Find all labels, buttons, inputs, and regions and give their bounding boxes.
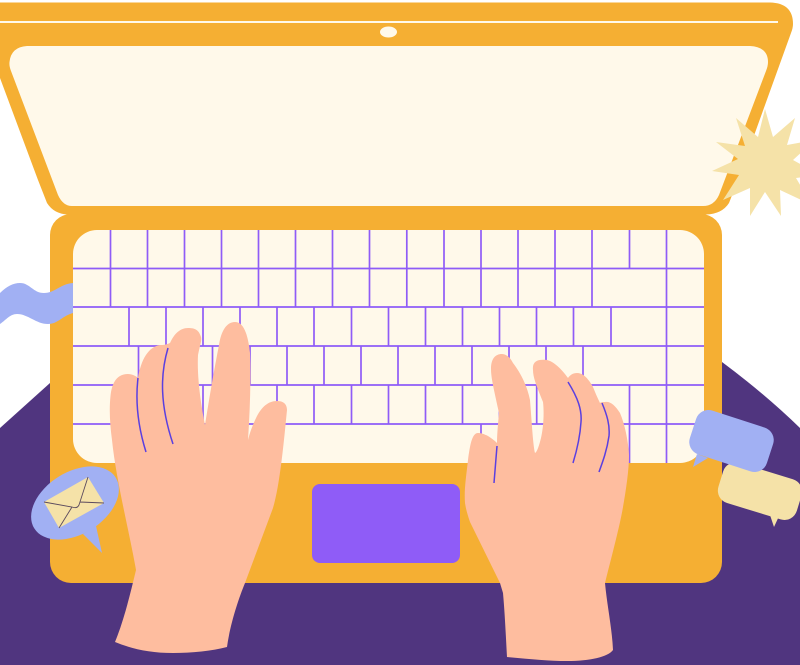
icon: envelope — [44, 477, 104, 528]
left hand shape — [110, 322, 287, 653]
right hand — [465, 354, 629, 661]
bubble tail — [83, 526, 102, 553]
right hand finger creases — [494, 382, 609, 483]
left hand finger creases — [137, 348, 173, 452]
lid highlight line — [0, 21, 778, 23]
webcam — [380, 26, 397, 38]
keyboard key grid — [73, 230, 704, 463]
laptop lid — [0, 2, 793, 214]
blue squiggle — [0, 283, 73, 324]
yellow speech bubble — [715, 459, 800, 527]
desk background — [0, 340, 800, 665]
right hand shape — [465, 354, 629, 661]
trackpad — [312, 484, 460, 563]
starburst — [712, 109, 800, 216]
email speech bubble — [18, 451, 132, 555]
blue speech bubble — [686, 407, 777, 475]
left hand — [110, 322, 287, 653]
laptop screen — [9, 46, 768, 206]
laptop base — [50, 214, 722, 583]
keyboard panel — [73, 230, 704, 463]
bubble body — [18, 451, 132, 555]
